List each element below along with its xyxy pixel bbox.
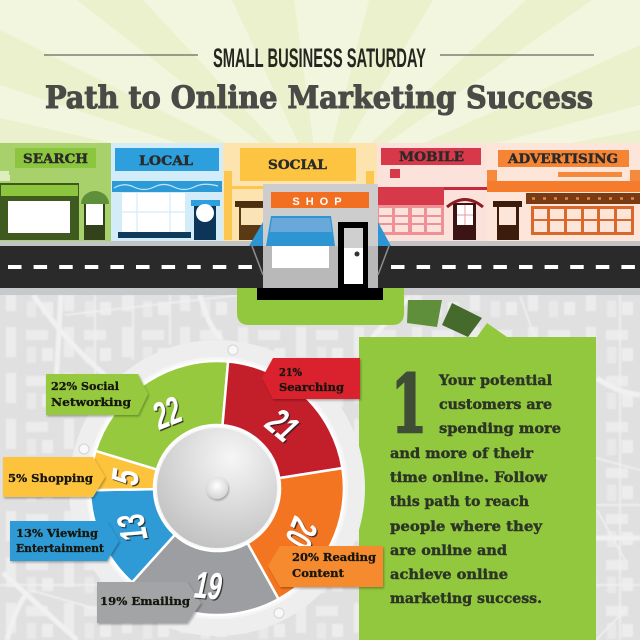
big numeral 1: 1 — [391, 357, 427, 451]
label: emailing: 19% Emailing — [100, 594, 190, 608]
label: searching: Searching — [279, 380, 344, 394]
body text — [390, 373, 561, 607]
segment numbers: 13 — [110, 510, 157, 545]
body text: this path to reach — [390, 494, 529, 510]
segment: 20 reading content — [248, 468, 344, 599]
label: shopping — [3, 457, 105, 497]
label: searching — [262, 358, 360, 399]
panel: text — [359, 323, 596, 640]
body text: and more of their — [390, 446, 534, 462]
central shop — [237, 184, 404, 325]
segment numbers: 5 — [104, 466, 148, 488]
header sunburst background — [0, 0, 640, 190]
storefront: mobile — [377, 143, 487, 241]
label: emailing — [97, 582, 201, 623]
body text: are online and — [390, 543, 507, 559]
shop sign — [271, 192, 369, 208]
shop sign: SHOP — [292, 196, 348, 208]
storefront: social: SOCIAL — [268, 158, 327, 173]
body text: marketing success. — [390, 591, 542, 607]
label: reading content — [268, 546, 383, 587]
label: social networking — [46, 374, 148, 415]
storefront: local: LOCAL — [139, 154, 193, 169]
body text: customers are — [439, 397, 552, 413]
label: shopping: 5% Shopping — [8, 471, 93, 485]
storefront: search: SEARCH — [23, 152, 88, 167]
segment: 13 viewing entertainment — [90, 489, 175, 582]
segment numbers: 22 — [147, 389, 188, 439]
body text: people where they — [390, 519, 543, 535]
segment numbers: 21 — [257, 401, 306, 451]
storefront: mobile: MOBILE — [399, 150, 464, 165]
label: searching: 21% — [279, 365, 302, 379]
segment numbers: 20 — [276, 512, 325, 553]
label: social networking: 22% Social — [51, 379, 120, 393]
label: reading content: Content — [292, 566, 345, 580]
segment: 21 searching — [222, 362, 342, 478]
segment: 19 emailing — [132, 535, 279, 615]
body text: time online. Follow — [390, 470, 548, 486]
storefront: social — [223, 143, 377, 241]
storefront: advertising — [487, 143, 640, 241]
label: social networking: Networking — [51, 395, 131, 409]
label: viewing entertainment: Entertainment — [16, 541, 105, 555]
body text: spending more — [439, 421, 561, 437]
path tiles — [407, 300, 482, 337]
segment: 22 social networking — [96, 361, 228, 470]
segment numbers — [104, 389, 325, 609]
label: reading content: 20% Reading — [292, 550, 376, 564]
segment: 5 shopping — [90, 451, 157, 490]
body text: Your potential — [438, 373, 552, 389]
storefront: local — [111, 143, 223, 241]
storefront: advertising: ADVERTISING — [507, 152, 618, 167]
body text: achieve online — [390, 567, 508, 583]
donut chart — [69, 340, 365, 636]
segment numbers: 19 — [193, 564, 223, 609]
title: small business saturday: SMALL BUSINESS SATURDAY — [213, 43, 426, 73]
label: viewing entertainment: 13% Viewing — [16, 526, 98, 540]
label: viewing entertainment — [10, 521, 119, 561]
storefront: search — [0, 143, 111, 241]
road — [0, 241, 640, 295]
center disc — [157, 428, 277, 548]
map background — [0, 295, 640, 640]
title: path to online marketing success: Path to Online Marketing Success — [45, 80, 593, 116]
